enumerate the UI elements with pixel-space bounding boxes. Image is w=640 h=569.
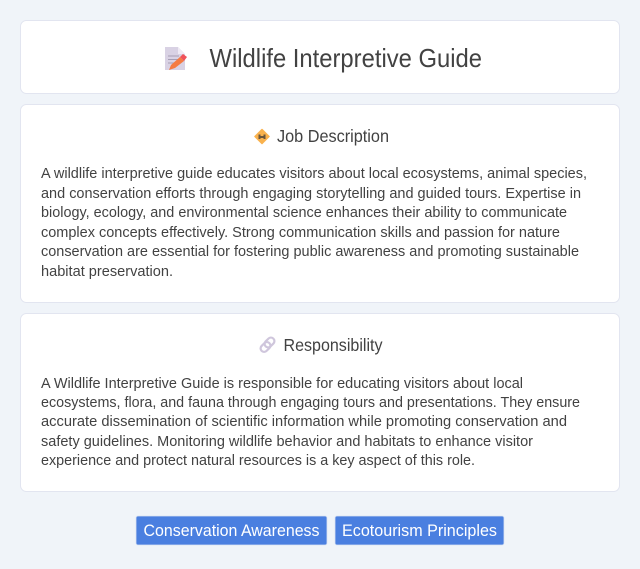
panel: responsibility: [20, 314, 620, 492]
heading: job description: Job Description: [277, 126, 389, 146]
title text: Wildlife Interpretive Guide: [210, 43, 482, 73]
tag: conservation awareness: [136, 516, 327, 545]
job description text: complex concepts effectively. Strong communication skills and passion for nature: [41, 224, 560, 241]
responsibility text: A Wildlife Interpretive Guide is responsible for educating visitors about local: [41, 375, 523, 392]
tag: ecotourism principles: [335, 516, 504, 545]
job description text: conservation are essential for fostering public awareness and promoting sustainable: [41, 243, 579, 260]
responsibility text: ecosystems, flora, and fauna through engaging tours and presentations. They ensure: [41, 394, 580, 411]
responsibility text: accurate dissemination of scientific information while promoting conservation and: [41, 413, 567, 430]
panel: title: [20, 20, 620, 94]
tag: ecotourism principles: Ecotourism Principles: [342, 522, 497, 540]
icon: diamond sign: [255, 130, 269, 144]
responsibility text: [41, 375, 580, 469]
heading: responsibility: Responsibility: [284, 335, 383, 355]
icon: document with pencil: [165, 47, 187, 70]
job description text: A wildlife interpretive guide educates visitors about local ecosystems, animal species,: [41, 165, 587, 182]
job description text: habitat preservation.: [41, 263, 173, 280]
tag: conservation awareness: Conservation Awareness: [144, 522, 320, 540]
responsibility text: safety guidelines. Monitoring wildlife behavior and habitats to enhance visitor: [41, 433, 533, 450]
job description text: and conservation efforts through engaging storytelling and guided tours. Expertise in: [41, 185, 581, 202]
job description text: [41, 165, 587, 280]
job description text: biology, ecology, and environmental science enhances their ability to communicate: [41, 204, 567, 221]
responsibility text: experience and protect natural resources is a key aspect of this role.: [41, 452, 475, 469]
icon: chain link: [259, 336, 276, 353]
panel: job description: [20, 104, 620, 302]
